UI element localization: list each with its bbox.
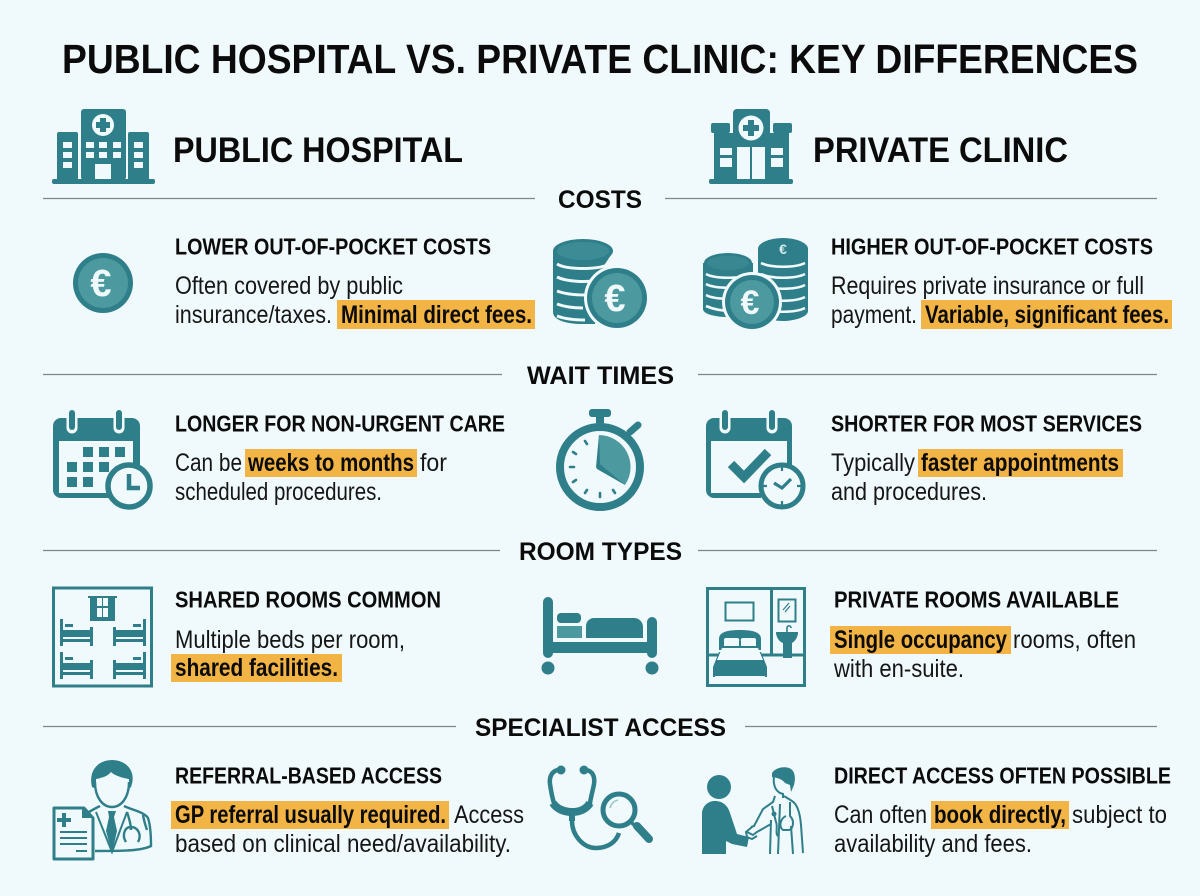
icon: stethoscope and magnifier — [550, 766, 649, 848]
section: costs — [43, 186, 1172, 332]
item body — [175, 272, 535, 329]
title: PUBLIC HOSPITAL VS. PRIVATE CLINIC: KEY DIFFERENCES — [62, 36, 1138, 82]
icon: coin stack: € — [604, 278, 626, 320]
item body: and procedures. — [831, 478, 987, 506]
column header: private clinic — [709, 109, 1068, 184]
icon: private clinic building — [709, 109, 793, 184]
icon: larger coin stacks: € — [741, 284, 760, 322]
item body: subject to — [1072, 801, 1167, 829]
icon: patient shaking hands with doctor — [702, 767, 803, 854]
icon: public hospital building — [52, 109, 155, 184]
item body — [834, 801, 1167, 858]
item body: Often covered by public — [175, 272, 403, 300]
item body — [831, 272, 1172, 329]
icon: stopwatch — [560, 409, 640, 507]
item body: Requires private insurance or full — [831, 272, 1144, 300]
item body: Can be — [175, 449, 242, 477]
item heading: SHARED ROOMS COMMON — [175, 586, 441, 612]
item body — [831, 449, 1123, 506]
section heading: costs: COSTS — [558, 186, 642, 214]
section heading: room types: ROOM TYPES — [519, 538, 682, 566]
text: direct access — [834, 762, 1171, 858]
item body — [171, 801, 524, 858]
item body: rooms, often — [1013, 626, 1136, 654]
icon: hospital bed — [542, 597, 658, 674]
item heading: LOWER OUT-OF-POCKET COSTS — [175, 234, 491, 260]
icon: coin stack — [553, 239, 650, 331]
icon: private room with en-suite — [707, 588, 805, 686]
heading: public hospital: PUBLIC HOSPITAL — [173, 131, 463, 170]
heading: private clinic: PRIVATE CLINIC — [813, 131, 1068, 170]
section heading: specialist access: SPECIALIST ACCESS — [475, 714, 726, 742]
section: specialist access — [43, 714, 1171, 859]
item body: faster appointments — [921, 449, 1119, 477]
item heading: HIGHER OUT-OF-POCKET COSTS — [831, 234, 1153, 260]
icon: larger coin stacks — [703, 238, 808, 332]
icon: calendar with clock — [53, 413, 150, 507]
item body: Single occupancy — [834, 626, 1007, 654]
text: shorter waits — [831, 410, 1142, 506]
text: higher costs — [831, 234, 1172, 329]
item body: insurance/taxes. — [175, 301, 332, 329]
section: wait times — [43, 362, 1157, 507]
text: private rooms — [830, 586, 1136, 683]
item body — [175, 449, 447, 506]
item body — [171, 626, 405, 682]
column header: public hospital — [52, 109, 463, 184]
icon: euro coin: € — [90, 263, 112, 305]
text: lower costs — [175, 234, 535, 329]
item heading: PRIVATE ROOMS AVAILABLE — [834, 586, 1119, 612]
icon: calendar with check — [706, 413, 803, 507]
item body: for — [420, 449, 447, 477]
item body: Multiple beds per room, — [175, 626, 405, 654]
icon: euro coin — [73, 253, 133, 313]
item body: book directly, — [934, 801, 1066, 829]
item heading: SHORTER FOR MOST SERVICES — [831, 410, 1142, 436]
item body: Minimal direct fees. — [341, 301, 532, 329]
item body: GP referral usually required. — [175, 801, 446, 829]
icon: doctor with referral document — [54, 760, 151, 859]
item body: payment. — [831, 301, 917, 329]
item body: with en-suite. — [833, 655, 964, 683]
item body: availability and fees. — [834, 830, 1032, 858]
item body — [830, 626, 1136, 683]
item heading: LONGER FOR NON-URGENT CARE — [175, 410, 505, 436]
item body: Typically — [831, 449, 915, 477]
section: room types — [43, 538, 1157, 686]
item body: weeks to months — [247, 449, 414, 477]
text: shared rooms — [171, 586, 441, 682]
icon: shared room with four beds — [54, 588, 152, 686]
item body: shared facilities. — [175, 654, 338, 682]
text: longer waits — [175, 410, 505, 506]
item body: based on clinical need/availability. — [175, 830, 511, 858]
text: referral access — [171, 762, 524, 858]
item body: Can often — [834, 801, 927, 829]
icon: larger coin stacks: € — [779, 241, 787, 257]
section heading: wait times: WAIT TIMES — [527, 362, 674, 390]
item heading: REFERRAL-BASED ACCESS — [175, 762, 442, 788]
item body: scheduled procedures. — [175, 478, 382, 506]
item body: Access — [454, 801, 524, 829]
